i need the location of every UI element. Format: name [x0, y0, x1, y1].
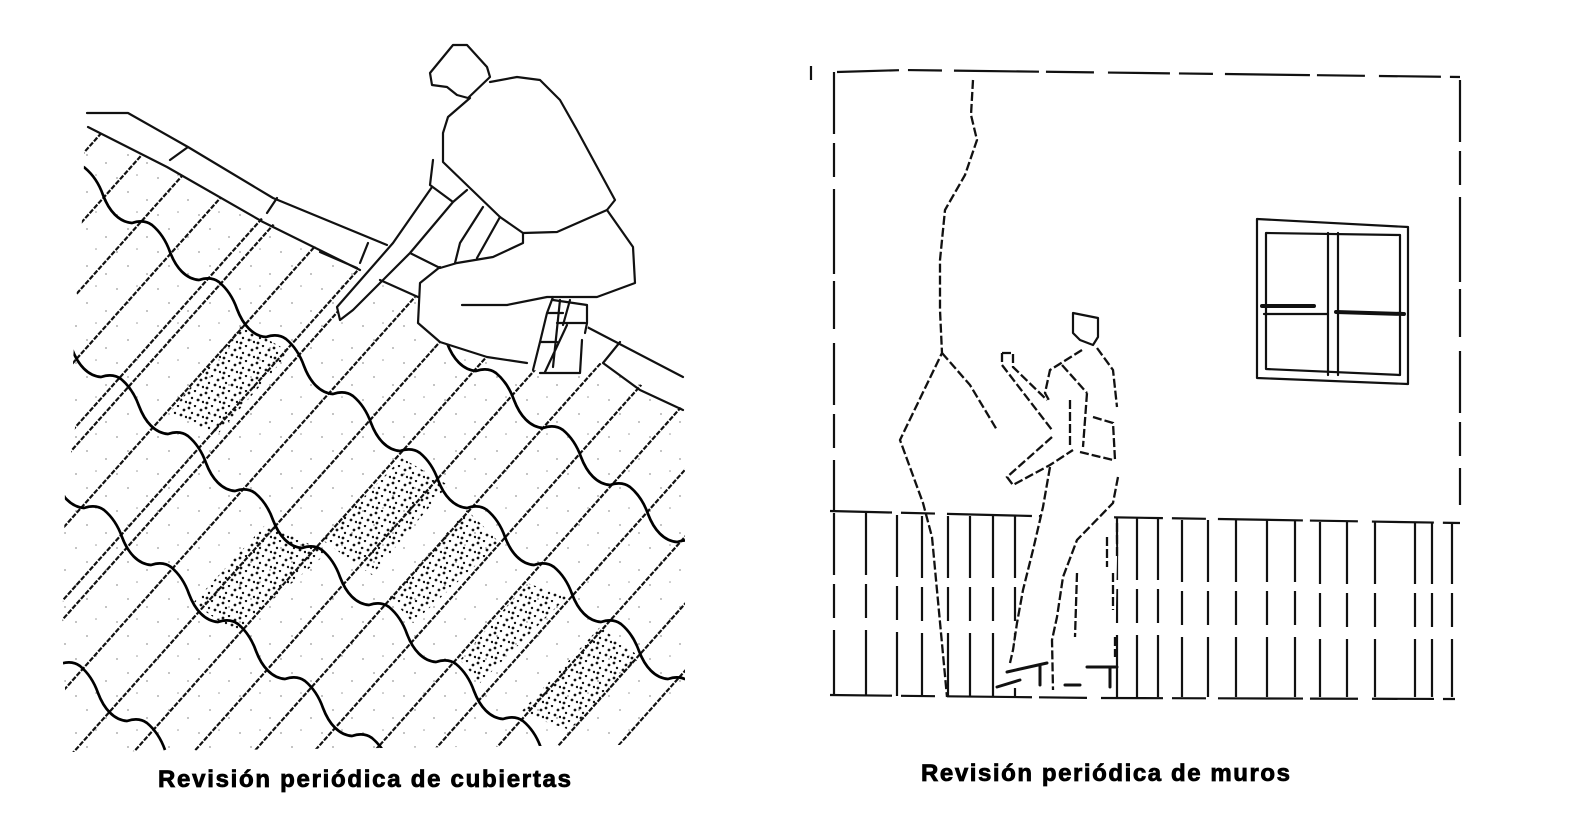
head	[1073, 313, 1098, 345]
wall outline	[811, 66, 1460, 510]
crack	[900, 80, 997, 697]
caption: walls: Revisión periódica de muros	[921, 760, 1290, 787]
torso	[443, 77, 615, 233]
scalloped tile rows	[84, 166, 685, 680]
worker	[337, 45, 635, 373]
upper body	[1045, 348, 1117, 460]
base boards	[830, 511, 1460, 699]
legs	[1010, 467, 1118, 690]
shoes	[997, 663, 1117, 687]
window	[1257, 219, 1408, 384]
person	[997, 313, 1118, 690]
stippled damaged tiles	[170, 325, 640, 730]
illustration: roof inspection	[62, 44, 685, 752]
illustration: wall inspection	[811, 66, 1460, 699]
arm and tool	[337, 160, 523, 320]
legs	[380, 210, 635, 363]
ridge	[87, 113, 683, 410]
tile ribs	[55, 120, 700, 755]
caption: roofs: Revisión periódica de cubiertas	[158, 766, 571, 793]
boots	[533, 297, 587, 373]
arms	[1002, 353, 1073, 485]
roof tiles	[62, 134, 685, 752]
head	[430, 45, 490, 98]
